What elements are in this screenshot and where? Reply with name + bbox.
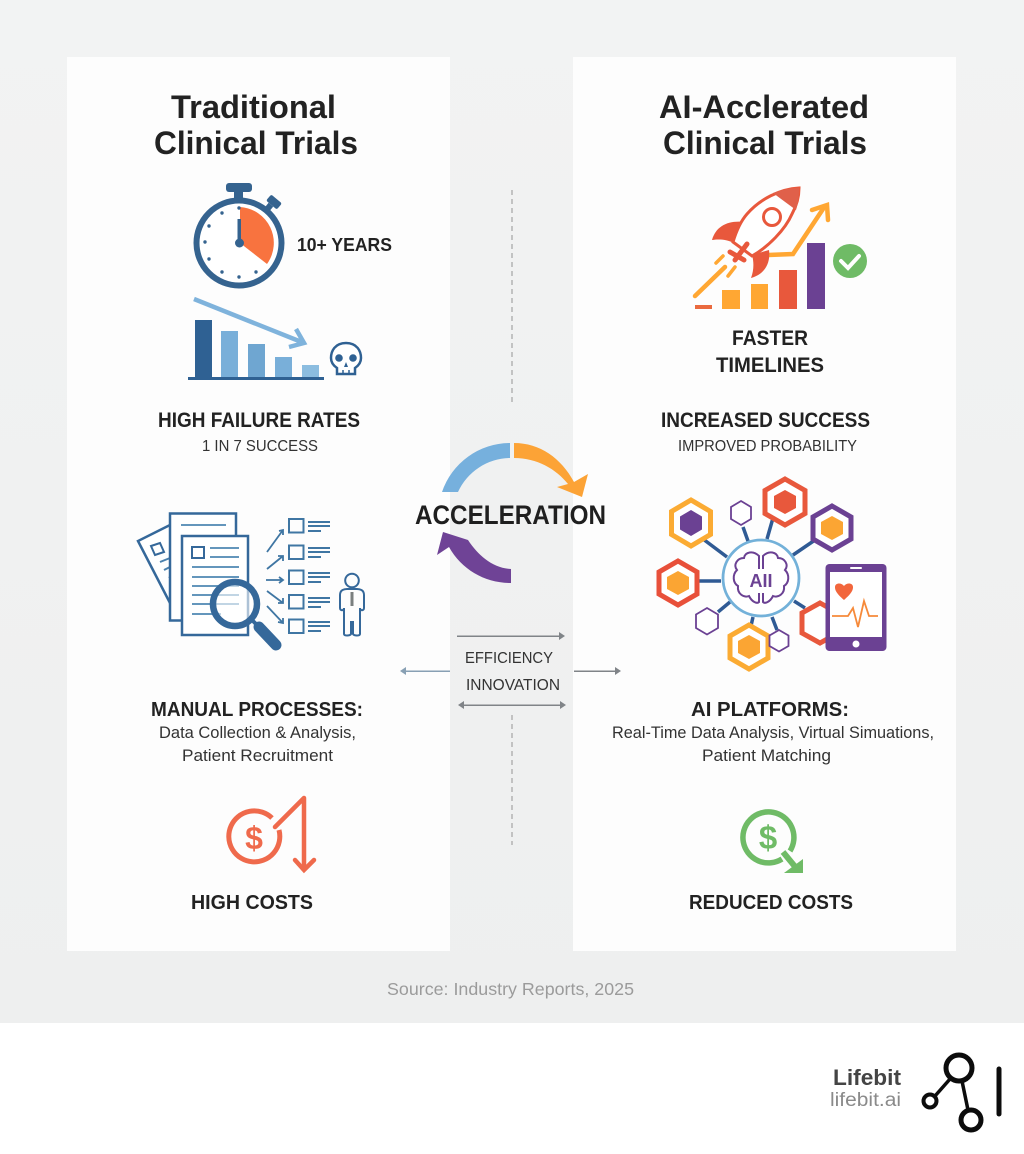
- label: acceleration: ACCELERATION: [415, 500, 606, 530]
- text: manual processes: Data Collection & Analysis,: [159, 724, 356, 742]
- icon: ai network: [659, 479, 886, 669]
- brand name: Lifebit: [833, 1065, 902, 1090]
- label: efficiency: EFFICIENCY: [465, 650, 553, 667]
- text: ai platforms: [612, 698, 934, 765]
- text: high failure rates: HIGH FAILURE RATES: [158, 409, 360, 432]
- sub-icon: small hexagons: [696, 501, 788, 652]
- label: faster timelines: [716, 327, 824, 377]
- icon: checklist with arrows: [266, 519, 330, 633]
- heading: ai-acclerated clinical trials: Clinical Trials: [663, 125, 867, 161]
- text: increased success: INCREASED SUCCESS: [661, 409, 870, 432]
- text: ai platforms: Real-Time Data Analysis, Virtual Simuations,: [612, 724, 934, 742]
- panel: traditional clinical trials: [67, 57, 450, 951]
- text: manual processes: Patient Recruitment: [182, 747, 333, 765]
- text: manual processes: MANUAL PROCESSES:: [151, 698, 363, 721]
- arrow: left arrow: [400, 667, 450, 675]
- text: manual processes: [151, 698, 363, 765]
- sub-icon: tablet with heartbeat: [826, 564, 886, 651]
- icon: person: [340, 574, 364, 636]
- icon: declining bar chart: [188, 299, 324, 380]
- text: ai platforms: AI PLATFORMS:: [691, 698, 849, 721]
- icon: documents with magnifier: [138, 514, 276, 645]
- label: faster timelines: TIMELINES: [716, 354, 824, 377]
- text: increased success: IMPROVED PROBABILITY: [678, 438, 857, 455]
- label: 10+ years: 10+ YEARS: [297, 235, 392, 255]
- sub-icon: brain: [734, 552, 788, 603]
- icon: dollar with falling arrow: [229, 798, 314, 870]
- icon: acceleration cycle arrows: [437, 443, 588, 583]
- text: ai platforms: Patient Matching: [702, 747, 831, 765]
- heading: ai-acclerated clinical trials: AI-Acclerated: [659, 89, 869, 125]
- icon: rising chart: [695, 205, 828, 309]
- icon: dollar with reducing arrow: [743, 812, 802, 872]
- text: high failure rates: [158, 409, 360, 455]
- heading: traditional clinical trials: Traditional: [171, 89, 336, 125]
- logo: lifebit nodes: [924, 1055, 999, 1130]
- icon: green check: [833, 244, 867, 278]
- icon: rocket: [712, 188, 799, 278]
- label: high costs: HIGH COSTS: [191, 891, 313, 914]
- icon: stopwatch: [196, 183, 282, 286]
- icon: skull: [331, 343, 361, 374]
- icon: dollar with reducing arrow: $: [759, 819, 777, 856]
- heading: traditional clinical trials: Clinical Trials: [154, 125, 358, 161]
- arrow: top right arrow: [457, 632, 565, 640]
- brand name: [830, 1065, 902, 1111]
- text: increased success: [661, 409, 870, 455]
- heading: traditional clinical trials: [154, 89, 358, 161]
- icon: ai network: AII: [749, 571, 773, 591]
- brand name: lifebit.ai: [830, 1090, 901, 1111]
- label: reduced costs: REDUCED COSTS: [689, 891, 853, 914]
- label: innovation: INNOVATION: [466, 677, 560, 694]
- arrow: double-headed arrow: [458, 701, 566, 709]
- text: high failure rates: 1 IN 7 SUCCESS: [202, 438, 318, 455]
- heading: ai-acclerated clinical trials: [659, 89, 869, 161]
- icon: dollar with falling arrow: $: [245, 820, 263, 856]
- arrow: right arrow: [574, 667, 621, 675]
- source note: Source: Industry Reports, 2025: [387, 979, 634, 999]
- label: faster timelines: FASTER: [732, 327, 808, 350]
- panel: ai-accelerated clinical trials: [573, 57, 956, 951]
- sub-icon: outer hexagons: [659, 479, 851, 669]
